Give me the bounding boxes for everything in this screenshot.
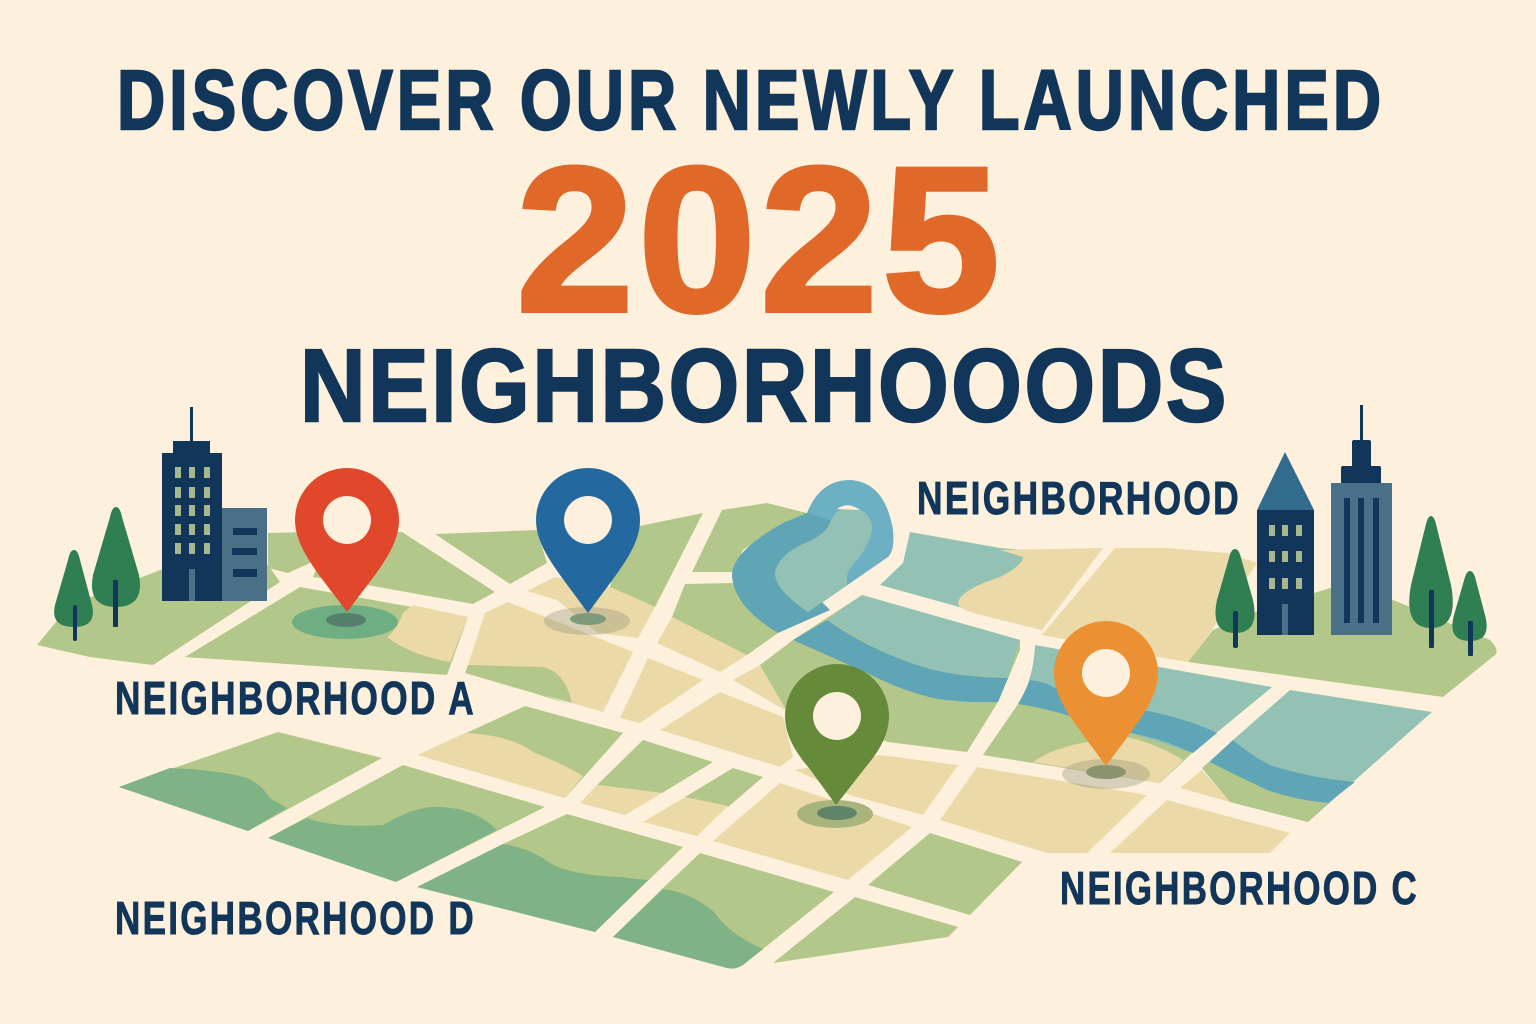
tan overlay <box>958 548 1103 630</box>
left city: buildings and trees <box>54 407 267 641</box>
map: south tan areas <box>418 733 728 836</box>
label: neighborhood d: NEIGHBORHOOD D <box>115 892 476 944</box>
map: east river block <box>983 645 1432 822</box>
river loop inner island <box>775 507 872 612</box>
map: south dark green areas <box>119 768 763 969</box>
map: central river <box>732 480 1020 702</box>
label: neighborhood: NEIGHBORHOOD <box>917 472 1241 524</box>
map: north east blocks <box>880 532 1497 697</box>
river loop darker bank <box>732 513 840 633</box>
map: upper left green blocks <box>37 503 807 675</box>
far east green <box>1202 762 1328 822</box>
right tree b <box>1409 516 1453 648</box>
east block tan <box>1033 737 1183 783</box>
left tree small <box>54 550 93 641</box>
title: neighborhoods: NEIGHBORHOOODS <box>300 328 1229 443</box>
left tree large <box>92 507 140 627</box>
far east teal <box>1202 690 1432 822</box>
right city: buildings and trees <box>1215 405 1487 656</box>
river loop cream gap <box>837 505 860 510</box>
tan block <box>1042 548 1257 662</box>
right tree a <box>1215 549 1255 648</box>
map: neighborhood street blocks <box>37 480 1497 969</box>
label: neighborhood a: NEIGHBORHOOD A <box>115 672 476 724</box>
small tan <box>1180 770 1230 802</box>
east block teal <box>983 645 1272 783</box>
right pointed building <box>1257 452 1314 635</box>
teal block <box>880 532 1042 630</box>
label: neighborhood c: NEIGHBORHOOD C <box>1060 862 1419 914</box>
right tree c <box>1452 571 1487 656</box>
right tall tower <box>1331 405 1392 635</box>
map: mid green pieces <box>465 583 1020 752</box>
pin: orange <box>1054 621 1158 789</box>
river loop <box>732 480 893 633</box>
map: upper centre tan blocks <box>387 577 793 767</box>
teal field <box>827 595 1020 678</box>
map: south east tan blocks <box>713 755 1290 880</box>
title: 2025: 2025 <box>516 124 1004 355</box>
pin: blue <box>536 468 640 635</box>
right park <box>1188 588 1497 697</box>
left tower <box>162 407 222 601</box>
left side building <box>222 508 267 601</box>
far east river <box>1210 740 1355 803</box>
river band <box>793 620 1008 702</box>
pin: green <box>785 664 889 828</box>
pin: red <box>292 468 399 639</box>
east block green <box>983 704 1192 783</box>
map: south green blocks <box>119 706 1022 969</box>
east block river <box>1018 680 1217 753</box>
